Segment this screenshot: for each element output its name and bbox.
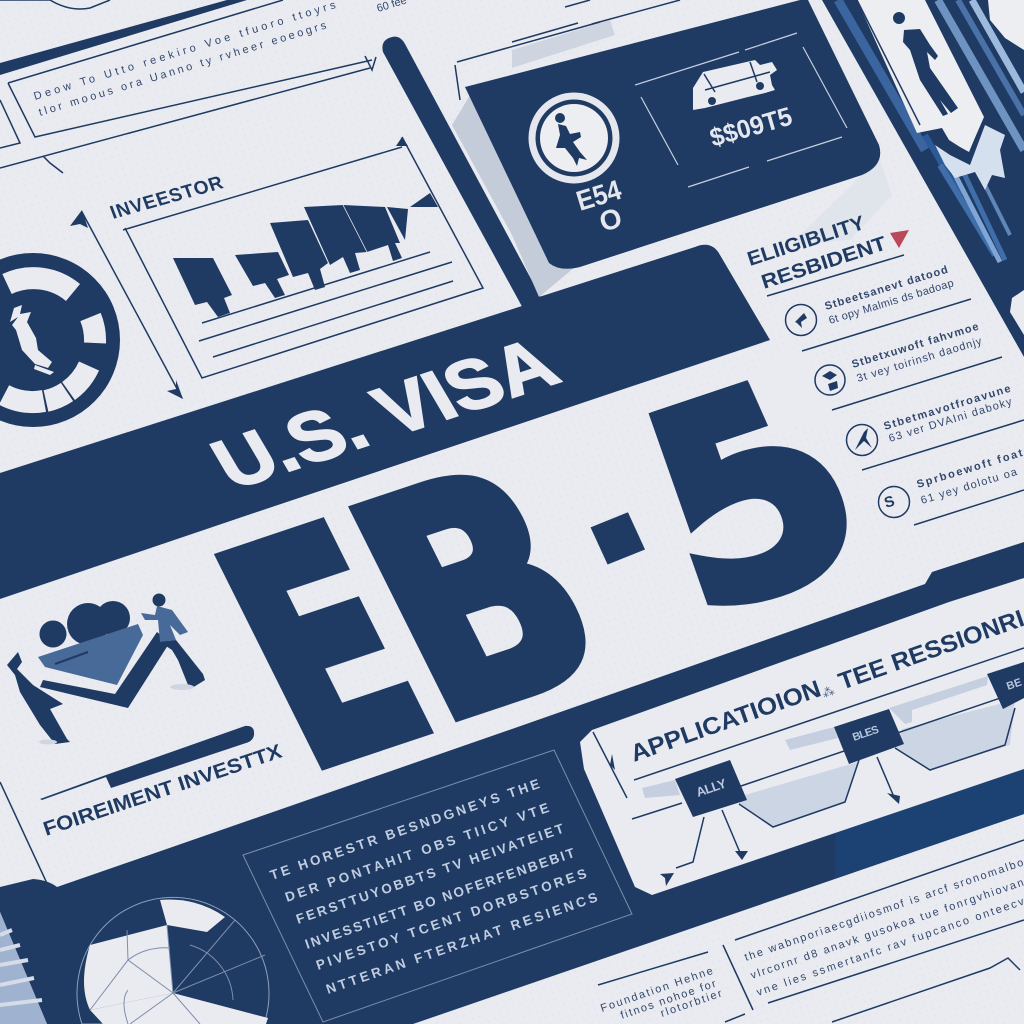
investor heading: INVEESTOR (107, 173, 226, 224)
icon: standing person (893, 12, 958, 116)
main title: EB-5 (176, 314, 897, 835)
top-left text panel: tlor moous ora Uanno ty rvheer eoeogrs (37, 20, 328, 119)
bars (173, 193, 438, 317)
investor chart panel (70, 137, 483, 399)
bottom-right text block: the wabnporiaecgdiiosmof is arcf sronomalbo (743, 857, 1024, 964)
torn paper shards (935, 125, 1005, 190)
eligibility heading: ELIIGIBLITY (745, 212, 868, 271)
amount text: $$09T5 (706, 101, 795, 153)
item 1: Stbeetsanevt datood (823, 264, 949, 313)
eligibility panel (745, 212, 1024, 525)
description box: FERSTTUYOBBTS TV HEIVATEIET (294, 821, 566, 927)
illustration: two people with briefcase (7, 594, 205, 744)
step box ALLY (675, 760, 747, 817)
description box (243, 750, 632, 1022)
foreign investment panel (0, 594, 285, 905)
bottom-centre text block: fitnos nohoe for (619, 978, 718, 1022)
arrows (676, 757, 894, 868)
description box: DER PONTAHIT OBS TIICY VTE (283, 800, 551, 905)
pie chart (77, 897, 269, 1024)
description box: PIVESTOY TCENT DORBSTORES (314, 866, 588, 973)
card label E54 O: E54 (573, 174, 625, 217)
step box BE (987, 662, 1024, 709)
investment card: O (596, 202, 626, 238)
title band (0, 245, 770, 599)
item 4: 61 yey dolotu oa (919, 466, 1019, 507)
title: U.S. VISA: U.S. VISA (198, 323, 571, 504)
step box BLES (834, 709, 904, 764)
application timeline panel (580, 578, 1024, 895)
bottom-centre text block: rlotorbtier (659, 988, 724, 1020)
intro text line 1: Deow To Utto reekiro Voe tfuoro ttoyrs (32, 0, 338, 103)
description box: TE HORESTR BESNDGNEYS THE (268, 776, 542, 883)
bottom-right text block: vne lies ssmertanfc rav fupcanco onteecv (755, 896, 1024, 999)
application timeline panel: ⁂ (820, 684, 836, 701)
icon: red triangle (890, 230, 909, 248)
step box BE: BE (1005, 677, 1023, 693)
item 3: Stbetmavotfroavune (882, 383, 1012, 433)
item 1: 6t opy Malmis ds badoap (827, 277, 955, 327)
timeline heading: APPLICATIOION (627, 675, 825, 768)
item 2: 3t vey toirinsh daodnjy (855, 335, 984, 385)
item 1 (786, 264, 955, 336)
icon: person in circle (532, 96, 616, 180)
main title: EB-5: 5 (610, 314, 897, 676)
bottom-centre text block: Foundation Hehne (599, 965, 715, 1015)
right stripes panel (822, 0, 1024, 357)
vertical divider bar (382, 37, 545, 312)
main title: EB-5: E (176, 464, 474, 835)
icon: circular emblem (0, 253, 120, 427)
item 3: 63 ver DVAIni daboky (887, 396, 1014, 445)
top-left text panel (0, 0, 408, 173)
bottom-right text block (723, 840, 1024, 1022)
vertical arrow (82, 212, 182, 398)
white poster with figure (857, 0, 984, 152)
step box BLES: BLES (851, 724, 881, 744)
main title: EB-5: B (306, 402, 650, 788)
item 3 (846, 383, 1014, 456)
item 2: Stbetxuwoft fahvmoe (850, 321, 980, 371)
step box ALLY: ALLY (694, 775, 729, 800)
eligibility panel: RESBIDENT (759, 233, 889, 294)
gray strips above card (455, 0, 680, 100)
light area charts (739, 762, 858, 827)
item 2 (815, 321, 984, 395)
investment card (465, 0, 880, 269)
bottom-centre text block (598, 952, 745, 1022)
icon: vehicle (693, 60, 777, 110)
panel shadow (452, 95, 575, 297)
main title: EB-5: - (516, 360, 706, 686)
caption: FOIREIMENT INVESTTX (41, 740, 285, 841)
bottom-right text block: vlrcornr d8 anavk gusokoa tue fonrgvhiovan (749, 877, 1024, 982)
description box: NTTERAN FTERZHAT RESIENCS (324, 890, 599, 997)
description box: INVESSTIETT BO NOFERFENBEBIT (303, 845, 577, 952)
application timeline panel: TEE RESSIONRI (835, 605, 1024, 696)
bottom arrow line (832, 958, 1020, 1022)
item 4 (878, 447, 1024, 518)
progress bar (40, 726, 254, 800)
item 4: S (882, 493, 897, 512)
item 4: Sprboewoft foat (915, 447, 1024, 491)
lower navy band (0, 542, 1024, 1024)
